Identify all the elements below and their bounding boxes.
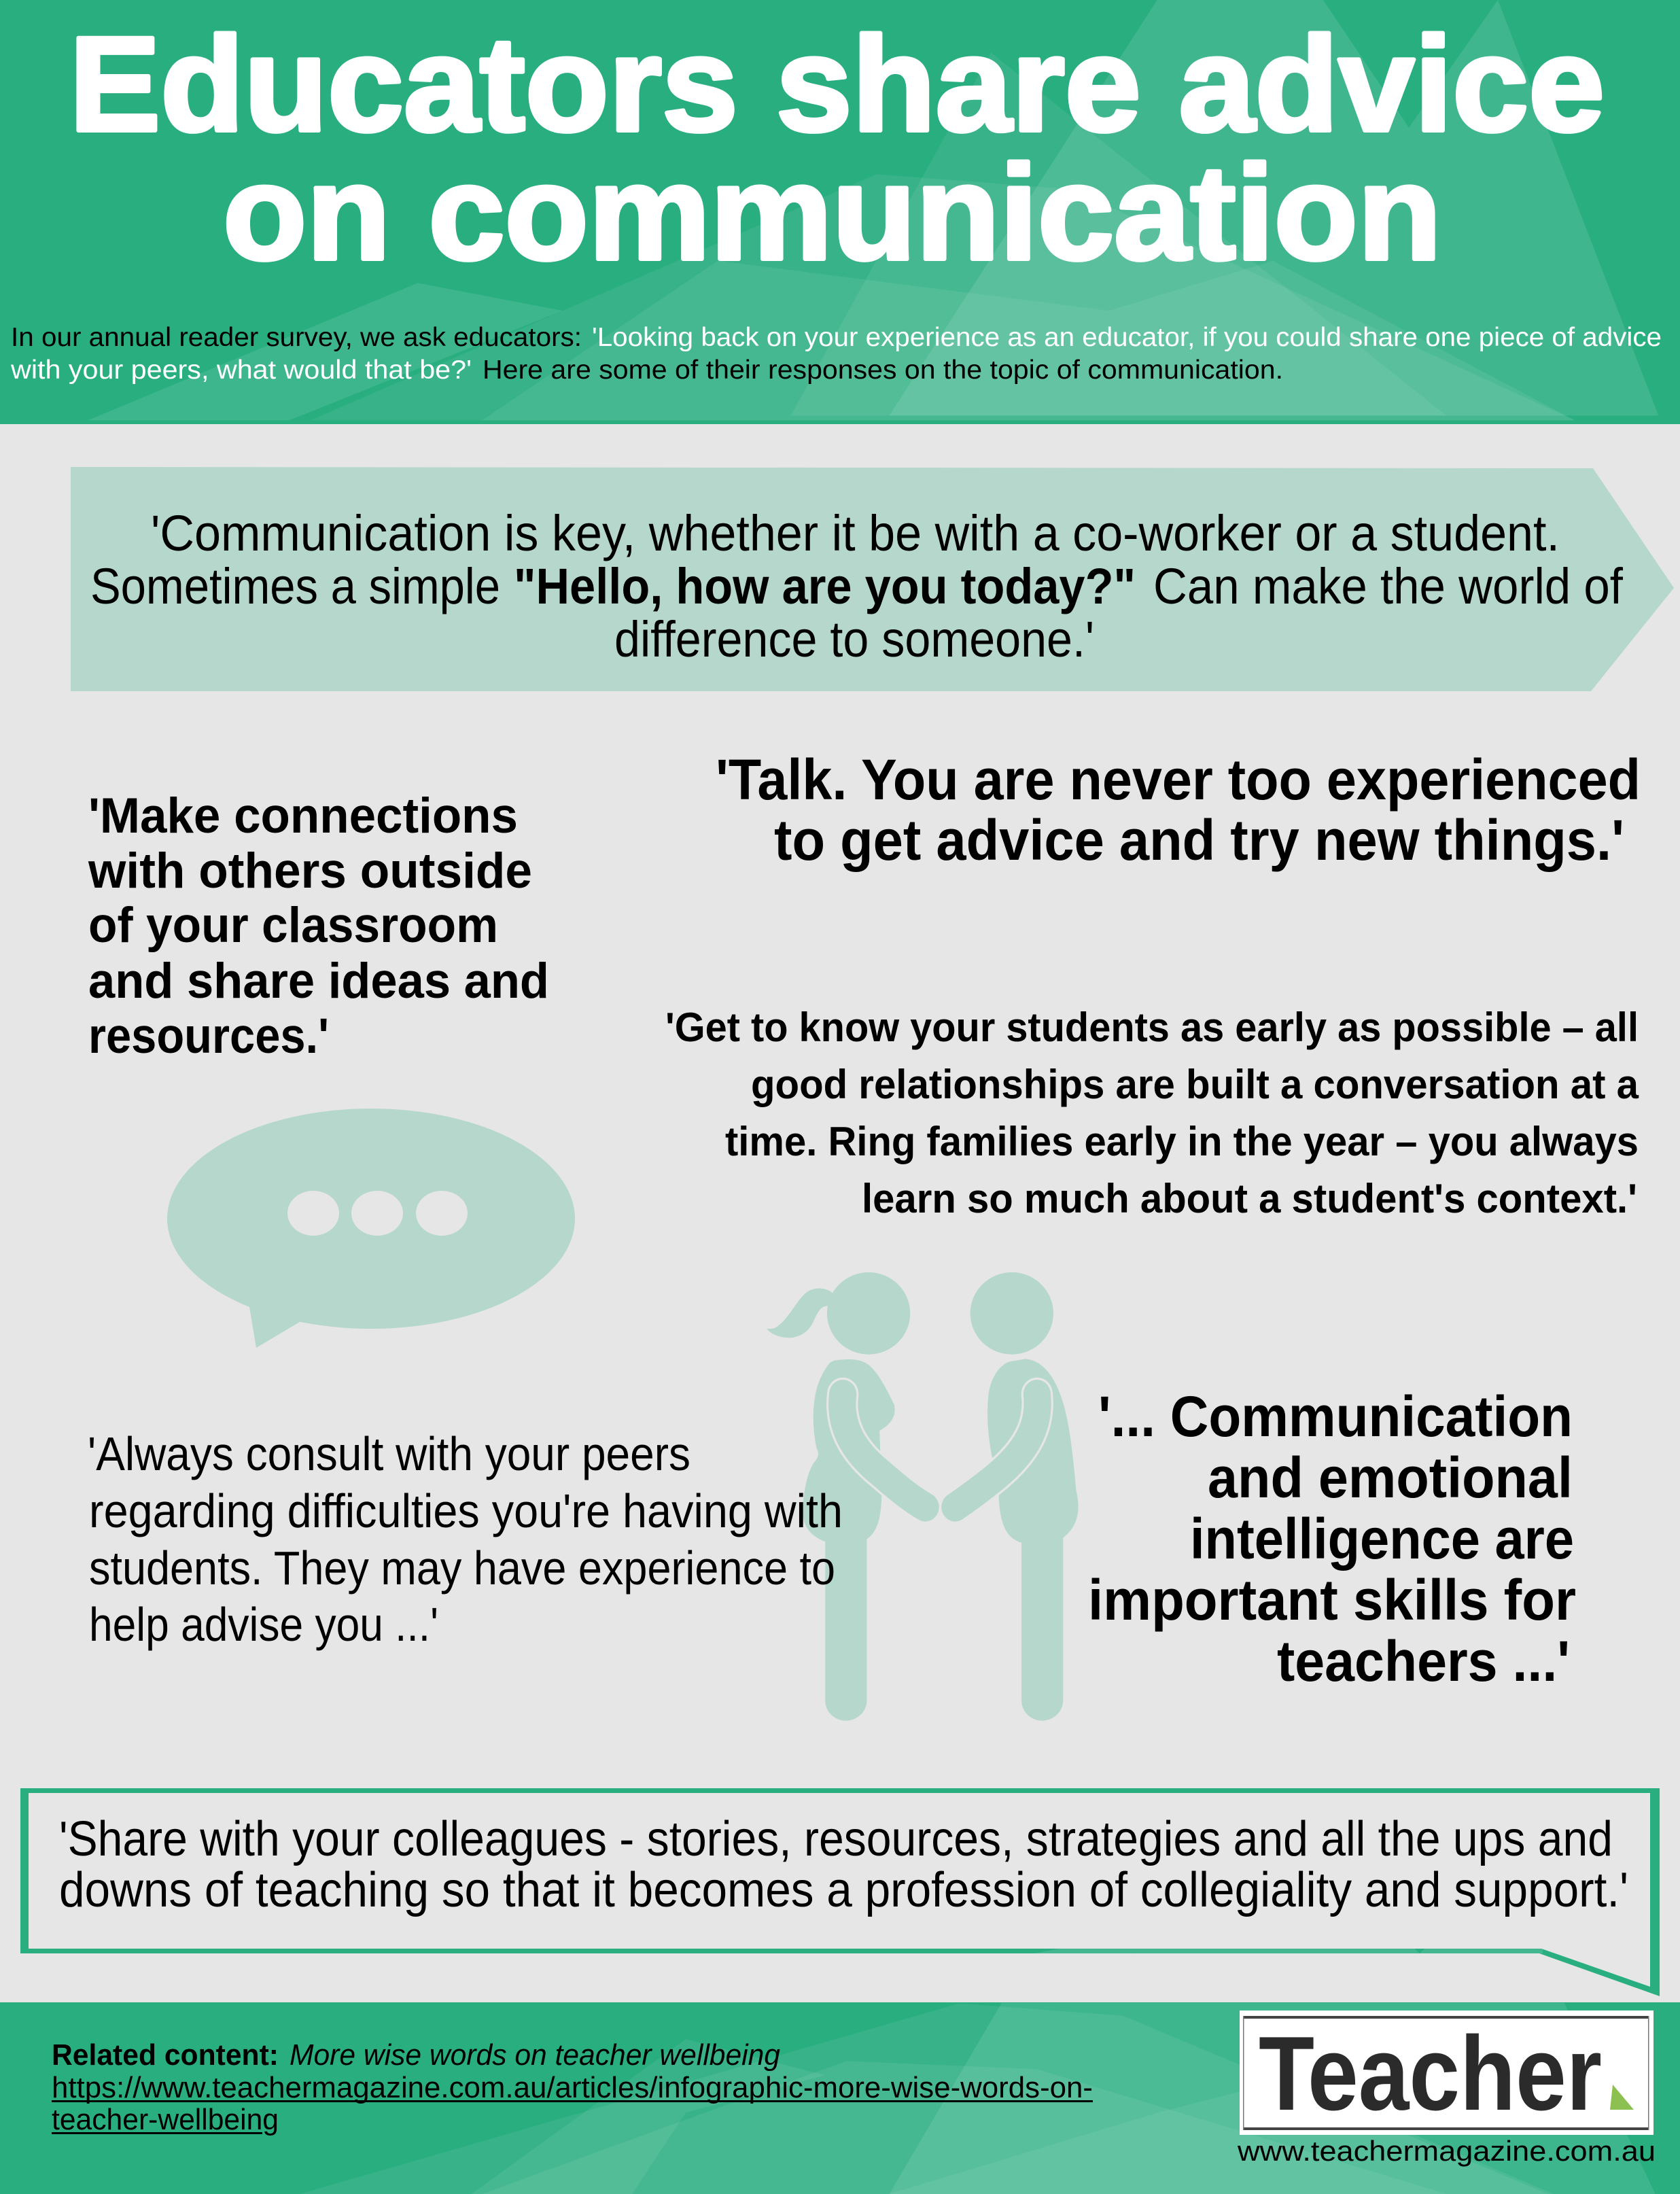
quote: communication and emotional intelligence: important skills for <box>1088 1568 1576 1632</box>
logo: Teacher: Teacher <box>1259 2015 1602 2132</box>
quote: get to know your students: 'Get to know your students as early as possible – all <box>665 1005 1639 1050</box>
banner quote text: "Hello, how are you today?" <box>514 558 1136 614</box>
quote: make connections: 'Make connections <box>88 788 518 843</box>
related content text: https://www.teachermagazine.com.au/articles/infographic-more-wise-words-on- <box>52 2071 1093 2104</box>
quote: talk: 'Talk. You are never too experienced <box>716 748 1641 812</box>
title: Educators share advice <box>69 9 1605 159</box>
quote: make connections: resources.' <box>88 1009 329 1064</box>
quote: get to know your students: time. Ring families early in the year – you always <box>725 1119 1639 1164</box>
related content text <box>52 2038 1093 2136</box>
panel: arrow banner quote <box>71 467 1674 691</box>
intro text <box>10 323 1662 385</box>
icon: woman figure <box>767 1272 926 1721</box>
related content text: More wise words on teacher wellbeing <box>290 2038 781 2072</box>
quote: make connections: of your classroom <box>88 898 498 953</box>
banner quote text <box>90 505 1623 667</box>
quote: communication and emotional intelligence <box>1088 1385 1576 1693</box>
intro text: 'Looking back on your experience as an educator, if you could share one piece of advice <box>592 323 1662 352</box>
intro text: In our annual reader survey, we ask educators: <box>11 323 582 352</box>
title <box>69 9 1605 288</box>
intro text: with your peers, what would that be?' <box>10 355 472 385</box>
quote: always consult: regarding difficulties you're having with <box>89 1484 843 1537</box>
website url: www.teachermagazine.com.au <box>1237 2135 1656 2167</box>
speech box quote text <box>59 1812 1628 1917</box>
quote: get to know your students <box>665 1005 1639 1221</box>
quote: always consult: students. They may have experience to <box>89 1542 835 1595</box>
quote: talk: to get advice and try new things.' <box>774 808 1624 872</box>
quote: make connections <box>88 788 549 1064</box>
quote: make connections: with others outside <box>88 843 532 899</box>
banner quote text: 'Communication is key, whether it be with a co-worker or a student. <box>151 505 1560 561</box>
quote: talk <box>716 748 1641 872</box>
quote: communication and emotional intelligence: intelligence are <box>1190 1507 1574 1571</box>
banner quote text: difference to someone.' <box>614 611 1094 667</box>
quote: communication and emotional intelligence: teachers ...' <box>1277 1629 1570 1693</box>
icon: two people holding hands <box>767 1272 1079 1721</box>
quote: communication and emotional intelligence: '... Communication <box>1098 1385 1573 1448</box>
quote: always consult: 'Always consult with your peers <box>88 1427 690 1480</box>
banner quote text: Sometimes a simple <box>90 558 500 614</box>
quote: always consult: help advise you ...' <box>89 1598 438 1651</box>
related content text: Related content: <box>52 2038 279 2072</box>
title: on communication <box>223 137 1441 288</box>
panel: footer <box>0 2002 1680 2194</box>
banner quote text: Can make the world of <box>1153 558 1623 614</box>
quote: communication and emotional intelligence: and emotional <box>1208 1446 1573 1510</box>
panel: outlined speech box <box>20 1788 1660 1996</box>
related content text: teacher-wellbeing <box>52 2103 279 2136</box>
quote: always consult <box>88 1427 843 1651</box>
icon: speech bubble <box>167 1109 575 1348</box>
quote: make connections: and share ideas and <box>88 954 549 1009</box>
quote: get to know your students: good relationships are built a conversation at a <box>751 1062 1639 1107</box>
panel: header <box>0 0 1680 424</box>
intro text: Here are some of their responses on the topic of communication. <box>483 355 1283 385</box>
icon: man figure <box>955 1272 1079 1721</box>
quote: get to know your students: learn so much about a student's context.' <box>862 1176 1637 1221</box>
